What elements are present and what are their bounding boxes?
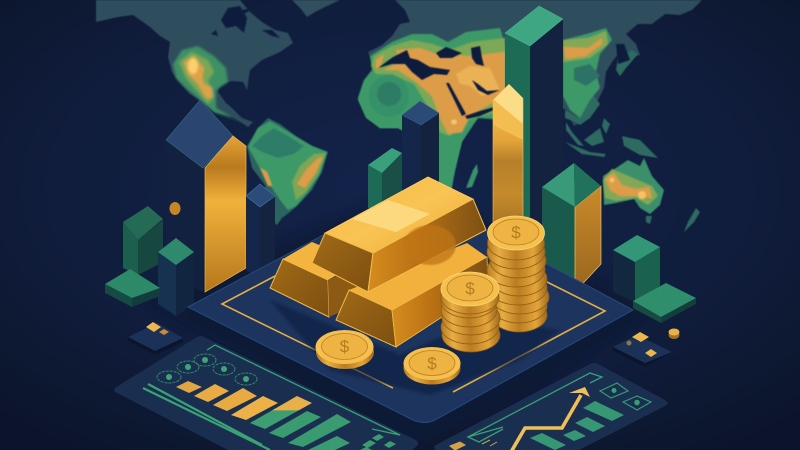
dashboard panel left (114, 336, 418, 450)
map: Southeast Asia and islands (565, 50, 700, 232)
chart bar: right green and gold (542, 163, 601, 292)
tower left face (166, 140, 203, 292)
platform (188, 190, 633, 440)
small keys (360, 434, 396, 450)
bar chart (176, 381, 351, 450)
coin symbol: $ (511, 223, 521, 242)
small gold glyphs (450, 440, 497, 450)
bar: lower right (336, 243, 488, 347)
green tile left (105, 269, 160, 307)
green bars (530, 401, 624, 450)
chart bar: green centre-left (368, 148, 402, 210)
coin face (488, 216, 544, 250)
chart bar: gold tower (493, 84, 523, 235)
map: Greenland (292, 0, 340, 17)
chart bar: tall green and navy (505, 6, 563, 240)
platform top (188, 190, 633, 422)
small card right (613, 332, 672, 367)
chart bar: small right green block (613, 235, 660, 302)
chart tower: left navy and gold (166, 100, 246, 292)
platform side (188, 307, 633, 440)
small gold token (668, 328, 680, 339)
bar: top (312, 177, 486, 292)
chart bar: small navy (246, 184, 275, 280)
axis lines (143, 384, 270, 450)
gold inset frame (222, 276, 605, 392)
heat: South America (248, 121, 327, 210)
map: seas and lakes (211, 6, 630, 119)
gold dot (170, 202, 180, 215)
small card left (128, 322, 183, 355)
green tile right (633, 283, 696, 323)
rising arrow (511, 387, 590, 450)
heat: North America (173, 46, 244, 124)
coin symbol: $ (340, 337, 350, 356)
indicator icons (600, 383, 651, 410)
shadow under gold bars and coins (270, 300, 560, 395)
heat: Australia (603, 169, 658, 205)
tower gold face (205, 136, 246, 292)
map: Madagascar (466, 164, 478, 188)
chart bar: navy centre (402, 101, 439, 190)
panel frame (207, 345, 400, 435)
status rings (157, 354, 257, 385)
map: North America land (96, 0, 293, 127)
coin symbol: $ (427, 354, 437, 373)
chart bar: left short navy with green roof (158, 238, 194, 316)
coin stack: large (487, 216, 549, 332)
bar: lower left (270, 242, 372, 317)
dashboard panel right (434, 363, 668, 450)
panel frame (468, 373, 602, 442)
chart bar: left green (123, 206, 163, 275)
coin: flat right (404, 347, 460, 384)
map: Australia land (603, 158, 664, 214)
panel surface (434, 363, 668, 450)
map: Africa land (358, 62, 478, 192)
coin: flat left (316, 330, 374, 369)
coin face (441, 272, 499, 306)
map: Eurasia land (368, 0, 702, 126)
map: South America land (247, 118, 328, 225)
coin symbol: $ (465, 279, 475, 298)
panel surface (114, 336, 418, 450)
coin stack: small (441, 272, 500, 352)
tower roof (166, 100, 233, 168)
heat: Asia (563, 28, 612, 118)
gold bars stack (270, 177, 488, 347)
map: Africa and Eurasia heat (358, 28, 510, 190)
world map (96, 0, 702, 232)
shadow under platform (150, 190, 650, 450)
